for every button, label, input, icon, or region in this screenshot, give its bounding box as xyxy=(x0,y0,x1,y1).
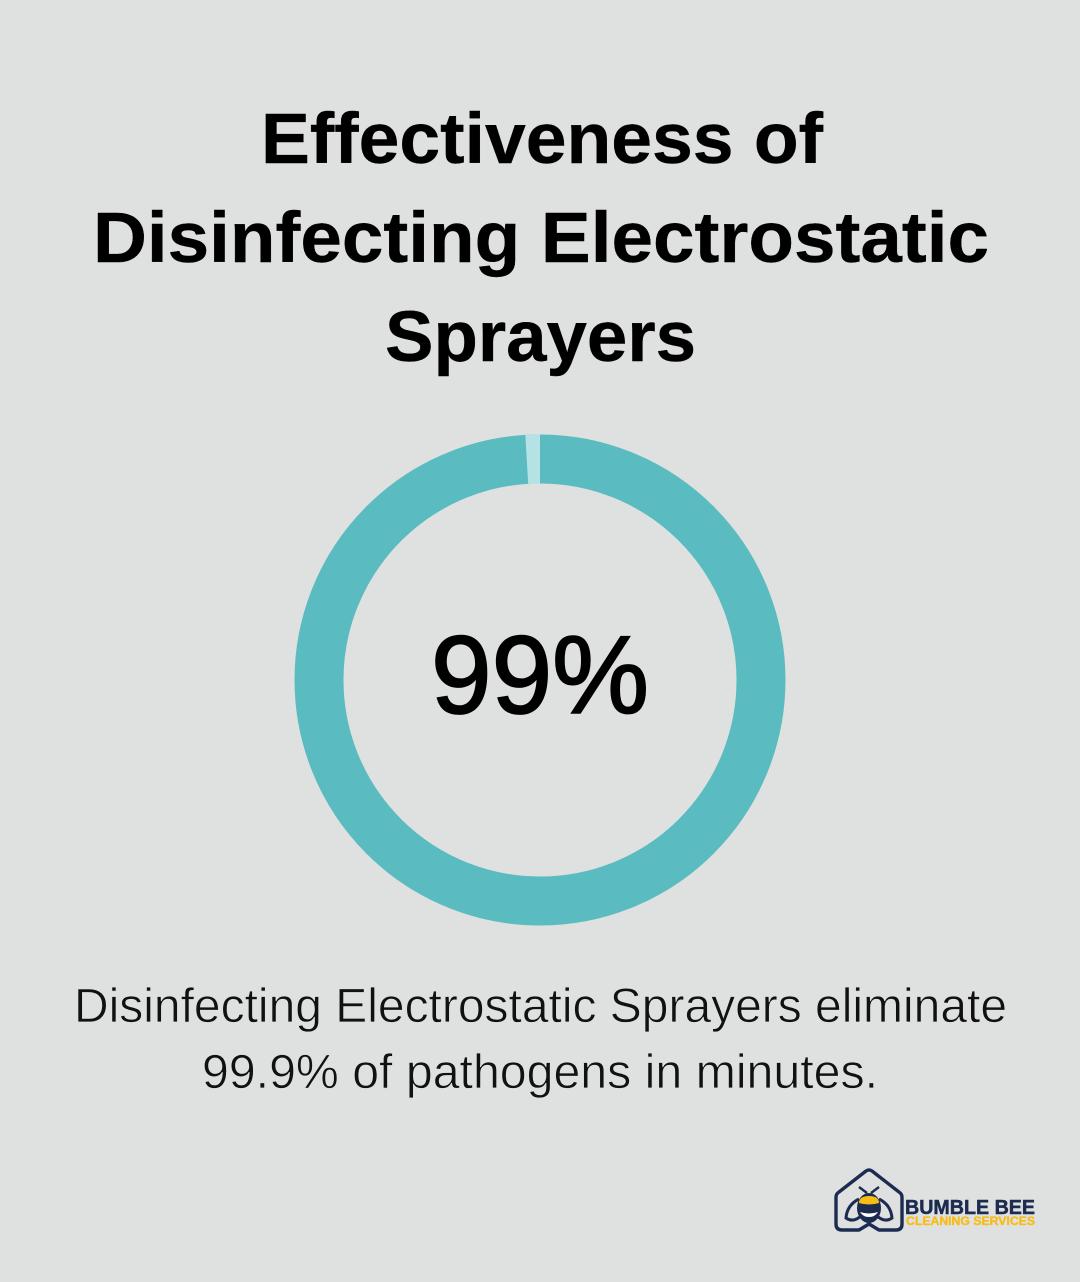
description text: Disinfecting Electrostatic Sprayers eliminate xyxy=(74,980,1007,1033)
title: Disinfecting Electrostatic xyxy=(93,199,989,278)
icon: house with bee xyxy=(836,1170,902,1230)
title: Sprayers xyxy=(385,298,696,377)
title: Effectiveness of xyxy=(261,100,823,179)
title xyxy=(93,100,989,377)
description text: 99.9% of pathogens in minutes. xyxy=(202,1046,878,1099)
donut value: 99% xyxy=(431,614,649,737)
donut chart: 99% xyxy=(319,434,761,901)
description text xyxy=(74,980,1007,1099)
logo tagline: CLEANING SERVICES xyxy=(906,1216,1035,1228)
logo: Bumble Bee Cleaning Services xyxy=(836,1170,1035,1230)
logo wordmark: BUMBLE BEE xyxy=(905,1197,1035,1219)
